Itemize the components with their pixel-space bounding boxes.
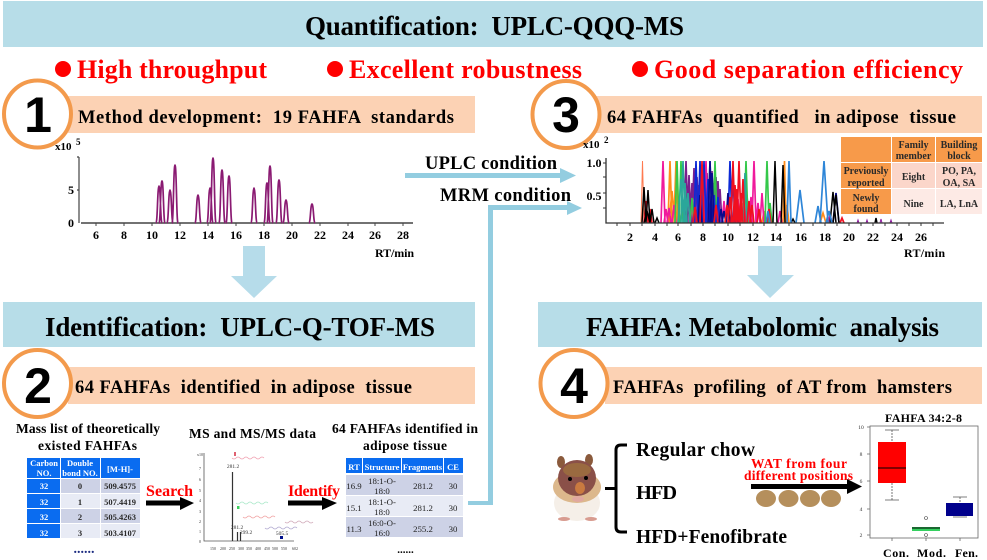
table: identified FAHFAs: 16:0-O- (368, 518, 396, 528)
table: FAHFA family summary: found (853, 204, 879, 215)
heading: identified FAHFAs: adipose tissue (363, 438, 447, 453)
chart: 19 FAHFA standards chromatogram: 28 (397, 228, 409, 242)
table: FAHFA family summary: Nine (904, 199, 924, 210)
chart: 64 FAHFAs chromatogram: 20 (843, 230, 855, 244)
table: FAHFA family summary: Eight (902, 172, 926, 183)
label: UPLC condition: UPLC condition (425, 154, 558, 174)
heading: identified FAHFAs (332, 421, 478, 453)
table: identified FAHFAs: 281.2 (413, 481, 433, 491)
chart: 19 FAHFA standards chromatogram: x10 (55, 141, 72, 153)
step 2 number circle: 2 (24, 358, 52, 414)
chart: FAHFA 34:2-8 boxplot: 4 (860, 507, 863, 513)
table: identified FAHFAs: 18:0 (374, 507, 390, 517)
arrow: UPLC condition to step 3 (405, 168, 576, 183)
chart: MS/MS spectrum: 4 (199, 498, 201, 503)
chart: FAHFA 34:2-8 boxplot: FAHFA 34:2-8 (885, 411, 962, 425)
chart: MS/MS spectrum: 2 (199, 519, 201, 524)
table: FAHFA family summary: Family (898, 140, 928, 151)
step 4 heading band (605, 367, 982, 404)
table: identified FAHFAs: 30 (449, 481, 458, 491)
label: WAT from four different positions: WAT from four (751, 456, 847, 471)
label: HFD: HFD (636, 482, 677, 504)
table: theoretical mass list: Double (67, 458, 93, 468)
chart: MS/MS spectrum: 150 (210, 546, 216, 551)
table: FAHFA family summary: Building (941, 140, 977, 151)
chart: 19 FAHFA standards chromatogram: 20 (286, 228, 298, 242)
icon: adipose tissue samples (756, 490, 841, 507)
step 4 heading band: FAHFAs profiling of AT from hamsters (613, 378, 952, 398)
arrow: search (146, 497, 194, 510)
chart: MS/MS spectrum: 300 (238, 546, 244, 551)
chart: 64 FAHFAs chromatogram: 1.0 (586, 156, 602, 170)
chart: MS/MS spectrum: x10 (197, 452, 203, 457)
chart: 64 FAHFAs chromatogram: 8 (700, 230, 706, 244)
chart: MS/MS spectrum: 500 (272, 546, 278, 551)
chart: MS/MS spectrum: 250 (229, 546, 235, 551)
table: theoretical mass list: 509.4575 (104, 481, 136, 491)
heading: MS data: MS and MS/MS data (189, 426, 316, 441)
heading: mass list: Mass list of theoretically (16, 421, 160, 436)
arrow: step 1 down to identification (231, 246, 277, 298)
chart: MS/MS spectrum: 5 (199, 488, 201, 493)
chart: FAHFA 34:2-8 boxplot (858, 411, 978, 560)
step 1 number circle (4, 80, 71, 148)
chart: 19 FAHFA standards chromatogram: 10 (146, 228, 158, 242)
chart: 19 FAHFA standards chromatogram: 26 (369, 228, 381, 242)
heading: mass list (16, 421, 160, 453)
chart: 64 FAHFAs chromatogram: 12 (747, 230, 759, 244)
chart: FAHFA 34:2-8 boxplot: 8 (860, 452, 863, 458)
chart: MS/MS spectrum: 6 (199, 477, 201, 482)
chart: 64 FAHFAs chromatogram: 18 (819, 230, 831, 244)
chart: MS/MS spectrum: 450 (264, 546, 270, 551)
chart: 19 FAHFA standards chromatogram: 5 (68, 183, 74, 197)
title banner: quantification (3, 1, 983, 47)
chart: 19 FAHFA standards chromatogram: 14 (202, 228, 214, 242)
heading: mass list: existed FAHFAs (38, 438, 137, 453)
chart: 19 FAHFA standards chromatogram: 8 (121, 228, 127, 242)
chart: MS/MS spectrum: 1 (199, 529, 201, 534)
table: identified FAHFAs: 16:0 (374, 528, 390, 538)
arrow: WAT sampling (751, 479, 862, 494)
chart: MS/MS spectrum: 7 (199, 466, 201, 471)
table: identified FAHFAs: 18:0 (374, 486, 390, 496)
step 1 heading band: Method development: 19 FAHFA standards (78, 108, 454, 128)
chart: MS/MS spectrum: 550 (281, 546, 287, 551)
table: FAHFA family summary: PO, PA, (942, 166, 976, 177)
chart: 19 FAHFA standards chromatogram: 22 (314, 228, 326, 242)
chart: MS/MS spectrum: 505.5 (276, 531, 288, 537)
step 4 number circle (540, 350, 608, 417)
banner: identification: Identification: UPLC-Q-TOF-MS (45, 312, 435, 342)
icon: hamster (553, 454, 601, 521)
table: identified FAHFAs: CE (447, 462, 459, 472)
table: identified FAHFAs: Structure (365, 462, 400, 472)
table: identified FAHFAs: 255.2 (413, 524, 433, 534)
chart: 19 FAHFA standards chromatogram: 16 (230, 228, 242, 242)
chart: MS/MS spectrum (197, 452, 313, 551)
step 2 heading band (68, 367, 475, 404)
table: theoretical mass list: 507.4419 (104, 497, 136, 507)
chart: 19 FAHFA standards chromatogram: 5 (76, 137, 81, 147)
chart: 64 FAHFAs chromatogram: 4 (652, 230, 658, 244)
bracket: diet groups (605, 445, 627, 532)
table: theoretical mass list (27, 458, 140, 538)
table: theoretical mass list: NO. (37, 468, 51, 478)
table: identified FAHFAs: 18:1-O- (368, 497, 396, 507)
arrow: identify (288, 497, 337, 510)
chart: MS/MS spectrum: 299.2 (240, 530, 252, 536)
arrow: step 3 down to metabolomic analysis (747, 246, 794, 298)
chart: MS/MS spectrum: 281.2 (227, 464, 239, 470)
chart: MS/MS spectrum: 602 (292, 546, 298, 551)
label: WAT from four different positions: different positions (744, 468, 853, 483)
chart: 64 FAHFAs chromatogram: x10 (583, 139, 600, 151)
chart: FAHFA 34:2-8 boxplot: Mod. (917, 546, 946, 560)
chart: 64 FAHFAs chromatogram: 10 (722, 230, 734, 244)
feature: excellent robustness: Excellent robustness (349, 55, 582, 84)
chart: 19 FAHFA standards chromatogram: 24 (342, 228, 354, 242)
banner: metabolomic analysis (538, 302, 982, 347)
chart: 19 FAHFA standards chromatogram: 12 (174, 228, 186, 242)
table: FAHFA family summary: Previously (844, 166, 888, 177)
label: search: Search (146, 483, 193, 500)
step 1 number circle: 1 (24, 87, 52, 143)
banner: metabolomic analysis: FAHFA: Metabolomic analysis (586, 312, 939, 342)
label: MRM condition: MRM condition (440, 186, 572, 206)
table: theoretical mass list: 1 (78, 497, 82, 507)
chart: 64 FAHFAs chromatogram: 6 (675, 230, 681, 244)
step 3 heading band (596, 96, 982, 133)
label: identify: Identify (288, 483, 340, 500)
label: WAT from four different positions (744, 456, 853, 483)
chart: MS/MS spectrum: 400 (255, 546, 261, 551)
chart: FAHFA 34:2-8 boxplot: Fen. (955, 546, 978, 560)
table: FAHFA family summary: reported (847, 178, 885, 189)
table: theoretical mass list: 32 (40, 512, 48, 522)
table: theoretical mass list: 32 (40, 528, 48, 538)
heading: identified FAHFAs: 64 FAHFAs identified in (332, 421, 478, 436)
table: identified FAHFAs (346, 458, 463, 538)
table: theoretical mass list: 505.4263 (104, 512, 136, 522)
chart: MS/MS spectrum: 0 (199, 539, 201, 544)
table: theoretical mass list: Carbon (30, 458, 58, 468)
chart: 64 FAHFAs chromatogram: RT/min (904, 246, 945, 260)
chart: MS/MS spectrum: 200 (220, 546, 226, 551)
step 2 heading band: 64 FAHFAs identified in adipose tissue (75, 378, 412, 398)
chart: 19 FAHFA standards chromatogram: 6 (93, 228, 99, 242)
label: HFD plus fenofibrate: HFD+Fenofibrate (636, 527, 787, 548)
table: identified FAHFAs: 16.9 (346, 481, 362, 491)
chart: 19 FAHFA standards chromatogram (55, 137, 414, 260)
step 2 number circle (4, 350, 71, 417)
chart: 64 FAHFAs chromatogram: 14 (770, 230, 782, 244)
banner: identification (3, 302, 475, 347)
table: theoretical mass list: bond NO. (62, 468, 98, 478)
table: FAHFA family summary: member (896, 151, 932, 162)
chart: 64 FAHFAs chromatogram: 2 (627, 230, 633, 244)
step 3 heading band: 64 FAHFAs quantified in adipose tissue (607, 108, 956, 128)
table: theoretical mass list: 32 (40, 481, 48, 491)
table: theoretical mass list: 0 (78, 481, 82, 491)
chart: MS/MS spectrum: 3 (199, 509, 201, 514)
chart: 19 FAHFA standards chromatogram: 18 (258, 228, 270, 242)
table: FAHFA family summary: OA, SA (943, 178, 976, 189)
chart: 19 FAHFA standards chromatogram: RT/min (375, 246, 414, 260)
table: theoretical mass list: [M-H]- (107, 464, 133, 474)
ellipsis: more masses: ...... (74, 542, 94, 557)
step 1 heading band (68, 96, 475, 133)
table: FAHFA family summary: LA, LnA (940, 199, 979, 210)
chart: 64 FAHFAs chromatogram (583, 135, 945, 260)
table: FAHFA family summary: Newly (853, 193, 879, 204)
table: identified FAHFAs: RT (348, 462, 360, 472)
label: regular chow: Regular chow (636, 440, 755, 461)
chart: 19 FAHFA standards chromatogram: 0 (68, 216, 74, 230)
step 3 number circle: 3 (552, 87, 580, 143)
table: theoretical mass list: 503.4107 (104, 528, 137, 538)
table: identified FAHFAs: 15.1 (346, 503, 362, 513)
ellipsis: more FAHFAs: ...... (397, 544, 414, 556)
table: identified FAHFAs: Fragments (403, 462, 443, 472)
chart: 64 FAHFAs chromatogram: 22 (867, 230, 879, 244)
chart: 64 FAHFAs chromatogram: 16 (795, 230, 807, 244)
chart: MS/MS spectrum: 281.2 (231, 525, 243, 531)
chart: 64 FAHFAs chromatogram: 2 (604, 135, 609, 145)
chart: MS/MS spectrum: 350 (246, 546, 252, 551)
chart: FAHFA 34:2-8 boxplot: Con. (883, 546, 909, 560)
step 3 number circle (532, 81, 600, 148)
table: FAHFA family summary (841, 137, 982, 215)
table: identified FAHFAs: 18:1-O- (368, 476, 396, 486)
table: FAHFA family summary: block (947, 151, 971, 162)
chart: FAHFA 34:2-8 boxplot: 6 (860, 479, 863, 485)
feature: good separation efficiency: Good separation efficiency (654, 55, 963, 84)
table: identified FAHFAs: 11.3 (346, 524, 362, 534)
table: theoretical mass list: 2 (78, 512, 82, 522)
table: identified FAHFAs: 30 (449, 524, 458, 534)
title banner: quantification: Quantification: UPLC-QQQ-MS (305, 11, 684, 41)
arrow: MRM condition from step 2 to step 3 (468, 201, 582, 505)
chart: 64 FAHFAs chromatogram: 24 (891, 230, 903, 244)
chart: 64 FAHFAs chromatogram: 26 (915, 230, 927, 244)
step 4 number circle: 4 (560, 358, 588, 414)
table: identified FAHFAs: 281.2 (413, 503, 433, 513)
chart: FAHFA 34:2-8 boxplot: 10 (858, 425, 864, 431)
chart: 64 FAHFAs chromatogram: 0.5 (586, 189, 602, 203)
table: identified FAHFAs: 30 (449, 503, 458, 513)
feature: high throughput: High throughput (77, 55, 267, 84)
chart: FAHFA 34:2-8 boxplot: 2 (860, 533, 863, 539)
table: theoretical mass list: 3 (78, 528, 82, 538)
table: theoretical mass list: 32 (40, 497, 48, 507)
